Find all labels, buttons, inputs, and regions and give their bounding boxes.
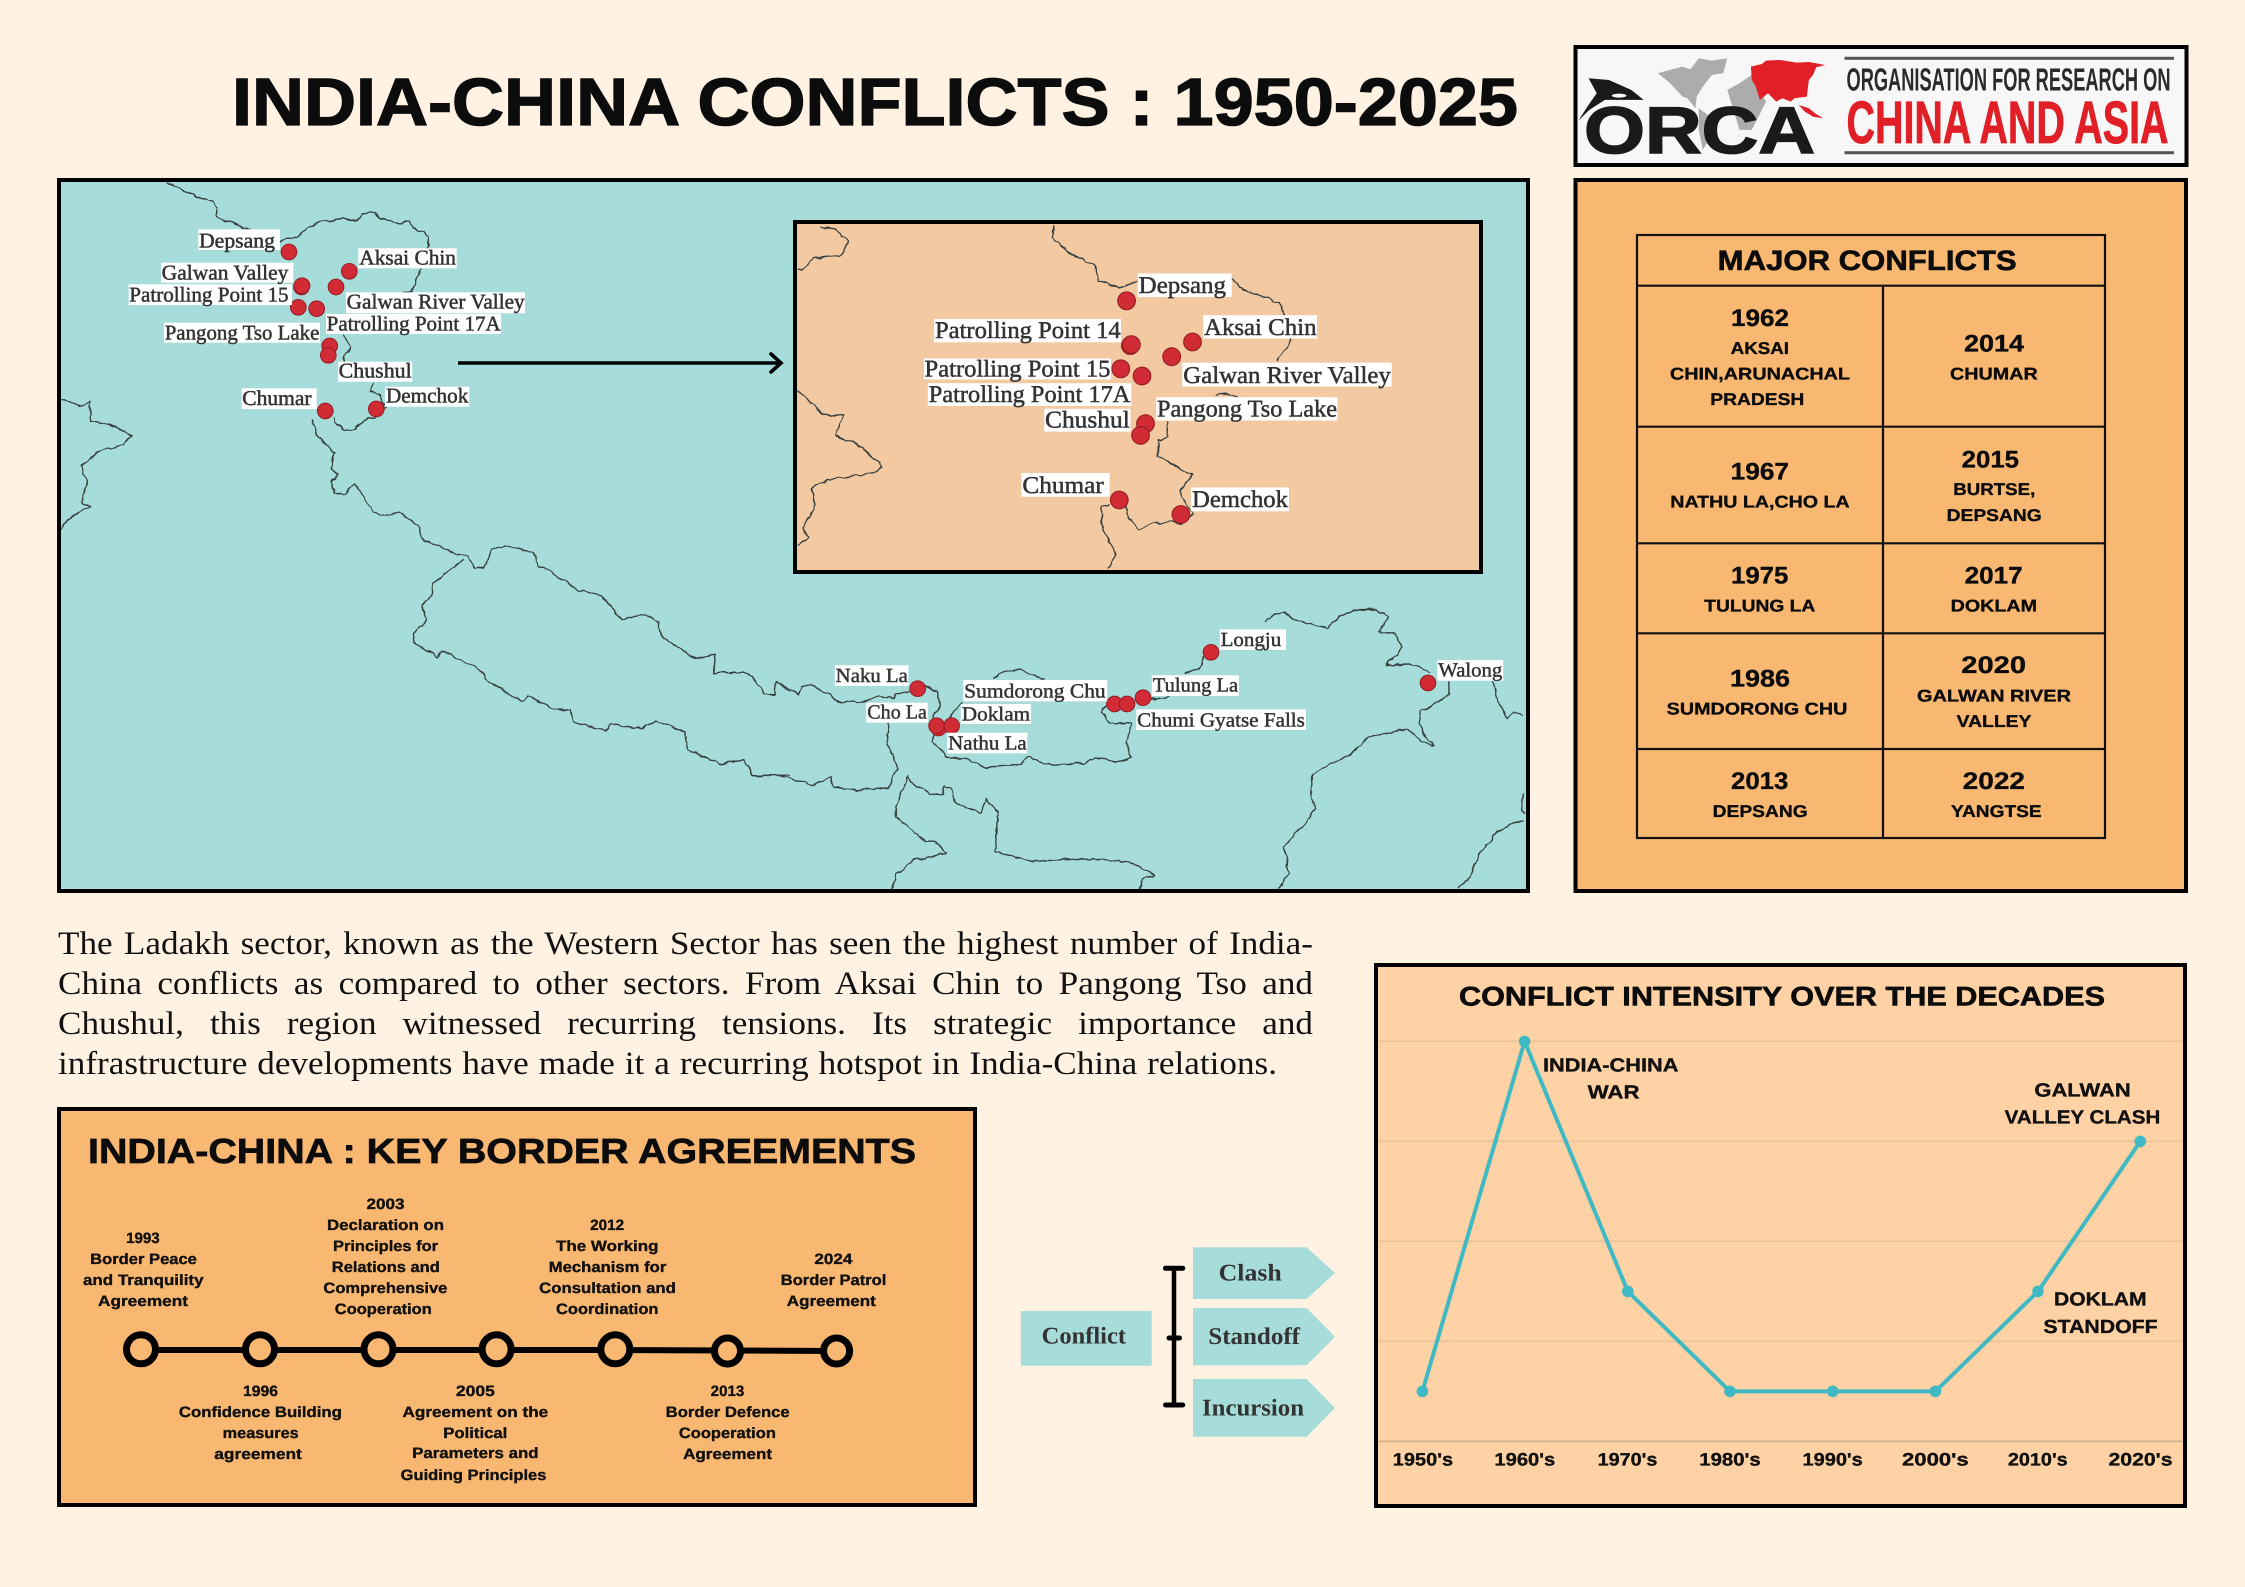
entry: 1962: PRADESH	[1710, 390, 1804, 409]
agreement: 2012: 2012	[590, 1217, 624, 1234]
inset markers	[1110, 292, 1201, 523]
arrow box: Incursion	[1193, 1379, 1335, 1437]
label: Tulung La: Tulung La	[1153, 675, 1238, 697]
text block: Ladakh sector paragraph: The Ladakh sector, known as the Western Sector has seen the highest number of India-	[58, 926, 1313, 962]
x axis labels: 1980's	[1699, 1449, 1761, 1469]
label: Galwan River Valley: Galwan River Valley	[347, 290, 525, 314]
entry: 2015	[1947, 446, 2042, 525]
entry: 1967	[1670, 458, 1850, 512]
label: Chumi Gyatse Falls: Chumi Gyatse Falls	[1137, 710, 1305, 732]
x axis labels: 2020's	[2108, 1449, 2172, 1469]
text block: Ladakh sector paragraph: Chushul, this region witnessed recurring tensions. Its strategic importance and	[58, 1006, 1313, 1042]
inset label: Depsang: Depsang	[1139, 273, 1226, 299]
agreement: 1993: and Tranquility	[83, 1272, 204, 1289]
text block: Ladakh sector paragraph: China conflicts as compared to other sectors. From Aksai Chin to Pangong Tso and	[58, 966, 1313, 1002]
x axis labels: 1970's	[1598, 1449, 1657, 1469]
panel: border map	[59, 180, 1528, 891]
entry: 1962	[1670, 305, 1850, 409]
agreement: 2012	[539, 1217, 676, 1318]
label: Aksai Chin: Aksai Chin	[359, 246, 456, 270]
agreement: 1996: Confidence Building	[179, 1404, 342, 1421]
agreement: 2005: 2005	[456, 1383, 495, 1400]
agreement: 1993: Border Peace	[90, 1251, 197, 1268]
arrow box: Standoff	[1193, 1308, 1335, 1365]
entry: 2015: DEPSANG	[1947, 506, 2042, 525]
arrow box: Clash: Clash	[1219, 1261, 1282, 1287]
map markers	[281, 244, 1436, 736]
agreement: 2024: 2024	[814, 1251, 853, 1268]
panel: conflict intensity chart	[1376, 965, 2185, 1506]
agreement: 2013: Cooperation	[679, 1425, 776, 1442]
bracket	[1166, 1268, 1183, 1405]
x axis labels: 1990's	[1802, 1449, 1863, 1469]
diagram: conflict types	[1021, 1247, 1335, 1437]
entry: 1962: AKSAI	[1731, 339, 1789, 358]
agreement: 1993: 1993	[126, 1230, 160, 1247]
annotation: Doklam Standoff: STANDOFF	[2043, 1317, 2158, 1338]
entry: 2022: 2022	[1963, 768, 2025, 795]
icon: world map and orca	[1578, 58, 1825, 150]
annotation: India-China War: WAR	[1588, 1083, 1640, 1104]
agreement: 2003: 2003	[366, 1196, 404, 1213]
entry: 2013: DEPSANG	[1713, 802, 1808, 821]
box: Conflict	[1021, 1311, 1152, 1366]
agreement: 1996	[179, 1383, 342, 1463]
label: Sumdorong Chu: Sumdorong Chu	[964, 680, 1106, 702]
map: central borders	[59, 398, 790, 775]
label: Doklam: Doklam	[962, 704, 1031, 726]
entry: 1962: CHIN,ARUNACHAL	[1670, 364, 1850, 384]
entry: 2015: BURTSE,	[1953, 480, 2035, 499]
title: INDIA-CHINA CONFLICTS : 1950-2025	[232, 65, 1518, 140]
x axis labels: 2010's	[2008, 1449, 2068, 1469]
agreement: 1993: Agreement	[98, 1293, 188, 1310]
entry: 1962: 1962	[1731, 305, 1789, 332]
arrow box: Incursion: Incursion	[1202, 1396, 1304, 1422]
agreement: 2012: Coordination	[556, 1301, 658, 1318]
entry: 1986	[1667, 665, 1847, 718]
agreement: 2024	[781, 1251, 886, 1310]
entry: 2017: DOKLAM	[1951, 596, 2037, 616]
agreement: 2003: Comprehensive	[323, 1280, 447, 1297]
agreement: 2013	[666, 1383, 790, 1463]
inset label: Galwan River Valley: Galwan River Valley	[1183, 363, 1391, 389]
x axis labels: 1960's	[1494, 1449, 1555, 1469]
inset label: Patrolling Point 15: Patrolling Point 15	[924, 357, 1110, 383]
entry: 1975: TULUNG LA	[1704, 596, 1815, 616]
agreement: 2012: The Working	[556, 1238, 658, 1255]
inset label: Demchok: Demchok	[1192, 487, 1288, 513]
box: Conflict: Conflict	[1042, 1323, 1126, 1349]
entry: 1967: 1967	[1731, 458, 1789, 486]
inset label: Patrolling Point 17A: Patrolling Point 17A	[929, 382, 1131, 408]
logo: ORCA	[1576, 47, 2186, 167]
entry: 2020: 2020	[1961, 652, 2026, 679]
entry: 2020: VALLEY	[1957, 712, 2032, 731]
agreement: 2005: Parameters and	[412, 1445, 539, 1462]
entry: 2014: 2014	[1964, 330, 2025, 358]
agreement: 2013: 2013	[711, 1383, 744, 1400]
annotation: India-China War	[1543, 1055, 1679, 1104]
arrow box: Standoff: Standoff	[1208, 1324, 1301, 1350]
agreement: 2003: Relations and	[332, 1259, 440, 1276]
inset borders	[798, 226, 1291, 568]
agreement: 1996: 1996	[243, 1383, 278, 1400]
table heading: MAJOR CONFLICTS	[1718, 245, 2017, 276]
agreement: 2005	[401, 1383, 548, 1484]
entry: 2017: 2017	[1965, 562, 2023, 589]
agreement: 2012: Mechanism for	[549, 1259, 666, 1276]
agreement: 2005: Guiding Principles	[401, 1467, 546, 1484]
line chart	[1417, 1036, 2146, 1397]
agreement: 2013: Border Defence	[666, 1404, 790, 1421]
x axis labels	[1393, 1449, 2172, 1469]
inset label: Pangong Tso Lake: Pangong Tso Lake	[1157, 397, 1337, 423]
label: Galwan Valley: Galwan Valley	[162, 260, 289, 284]
entry: 2022	[1951, 768, 2042, 821]
label: Walong: Walong	[1438, 660, 1502, 682]
annotation: Galwan Valley Clash: VALLEY CLASH	[2005, 1108, 2160, 1129]
entry: 2014: CHUMAR	[1950, 364, 2038, 384]
entry: 2022: YANGTSE	[1951, 802, 2042, 821]
logo: ORCA: ORCA	[1584, 93, 1815, 167]
panel: major conflicts	[1576, 180, 2186, 891]
entry: 2015: 2015	[1962, 446, 2019, 473]
x axis labels: 2000's	[1902, 1449, 1969, 1469]
inset label: Chumar: Chumar	[1022, 473, 1104, 499]
agreement: 2003	[323, 1196, 447, 1318]
agreement: 1996: agreement	[214, 1446, 302, 1463]
annotation: Galwan Valley Clash: GALWAN	[2034, 1080, 2131, 1101]
inset label: Chushul: Chushul	[1045, 407, 1130, 433]
label: Pangong Tso Lake: Pangong Tso Lake	[165, 320, 319, 344]
entry: 2020	[1917, 652, 2071, 731]
timeline	[126, 1335, 850, 1364]
panel: key border agreements	[59, 1109, 975, 1505]
table grid	[1637, 235, 2105, 838]
agreement: 2003: Principles for	[333, 1238, 438, 1255]
entry: 1986: SUMDORONG CHU	[1667, 700, 1847, 718]
entry: 1975	[1704, 562, 1815, 616]
entry: 1986: 1986	[1730, 665, 1790, 692]
text block: Ladakh sector paragraph	[58, 926, 1313, 1082]
agreement: 2005: Political	[443, 1425, 507, 1442]
label: Chushul: Chushul	[339, 359, 412, 383]
x axis labels: 1950's	[1393, 1449, 1453, 1469]
inset label: Patrolling Point 14: Patrolling Point 14	[935, 318, 1121, 344]
agreement: 2005: Agreement on the	[402, 1404, 548, 1421]
map inset panel	[795, 222, 1481, 572]
label: Longju: Longju	[1221, 629, 1281, 651]
inset label: Aksai Chin: Aksai Chin	[1204, 315, 1316, 341]
agreement: 1993	[83, 1230, 204, 1310]
entry: 2014	[1950, 330, 2038, 384]
label: Naku La: Naku La	[836, 665, 908, 687]
agreements heading: INDIA-CHINA : KEY BORDER AGREEMENTS	[88, 1132, 916, 1171]
entry: 2020: GALWAN RIVER	[1917, 686, 2071, 706]
entry: 2013	[1713, 768, 1808, 821]
entry: 2017	[1951, 562, 2037, 616]
label: Depsang: Depsang	[199, 228, 276, 252]
annotation: Doklam Standoff: DOKLAM	[2054, 1290, 2147, 1311]
agreement: 1996: measures	[223, 1425, 299, 1442]
agreement: 2012: Consultation and	[539, 1280, 676, 1297]
label: Cho La: Cho La	[867, 702, 927, 724]
text block: Ladakh sector paragraph: infrastructure developments have made it a recurring hotspot in India-China relations.	[58, 1046, 1277, 1082]
agreement: 2013: Agreement	[683, 1446, 772, 1463]
agreement: 2024: Border Patrol	[781, 1272, 886, 1289]
label: Chumar: Chumar	[242, 386, 312, 410]
map: east borders	[780, 609, 1524, 888]
map: west borders	[167, 182, 428, 430]
annotation: India-China War: INDIA-CHINA	[1543, 1055, 1679, 1076]
chart heading: CONFLICT INTENSITY OVER THE DECADES	[1459, 982, 2105, 1012]
label: Patrolling Point 15: Patrolling Point 15	[129, 282, 289, 306]
arrow box: Clash	[1193, 1247, 1335, 1299]
entry: 1975: 1975	[1731, 562, 1788, 589]
label: Nathu La: Nathu La	[948, 732, 1027, 754]
label: Demchok: Demchok	[386, 384, 469, 408]
annotation: Doklam Standoff	[2043, 1290, 2158, 1338]
entry: 1967: NATHU LA,CHO LA	[1670, 492, 1850, 512]
arrow: main map to inset	[458, 354, 781, 372]
label: Patrolling Point 17A: Patrolling Point 17A	[327, 312, 502, 336]
agreement: 2003: Declaration on	[327, 1217, 444, 1234]
agreement: 2024: Agreement	[787, 1293, 876, 1310]
entry: 2013: 2013	[1731, 768, 1788, 795]
annotation: Galwan Valley Clash	[2005, 1080, 2160, 1129]
agreement: 2003: Cooperation	[335, 1301, 432, 1318]
